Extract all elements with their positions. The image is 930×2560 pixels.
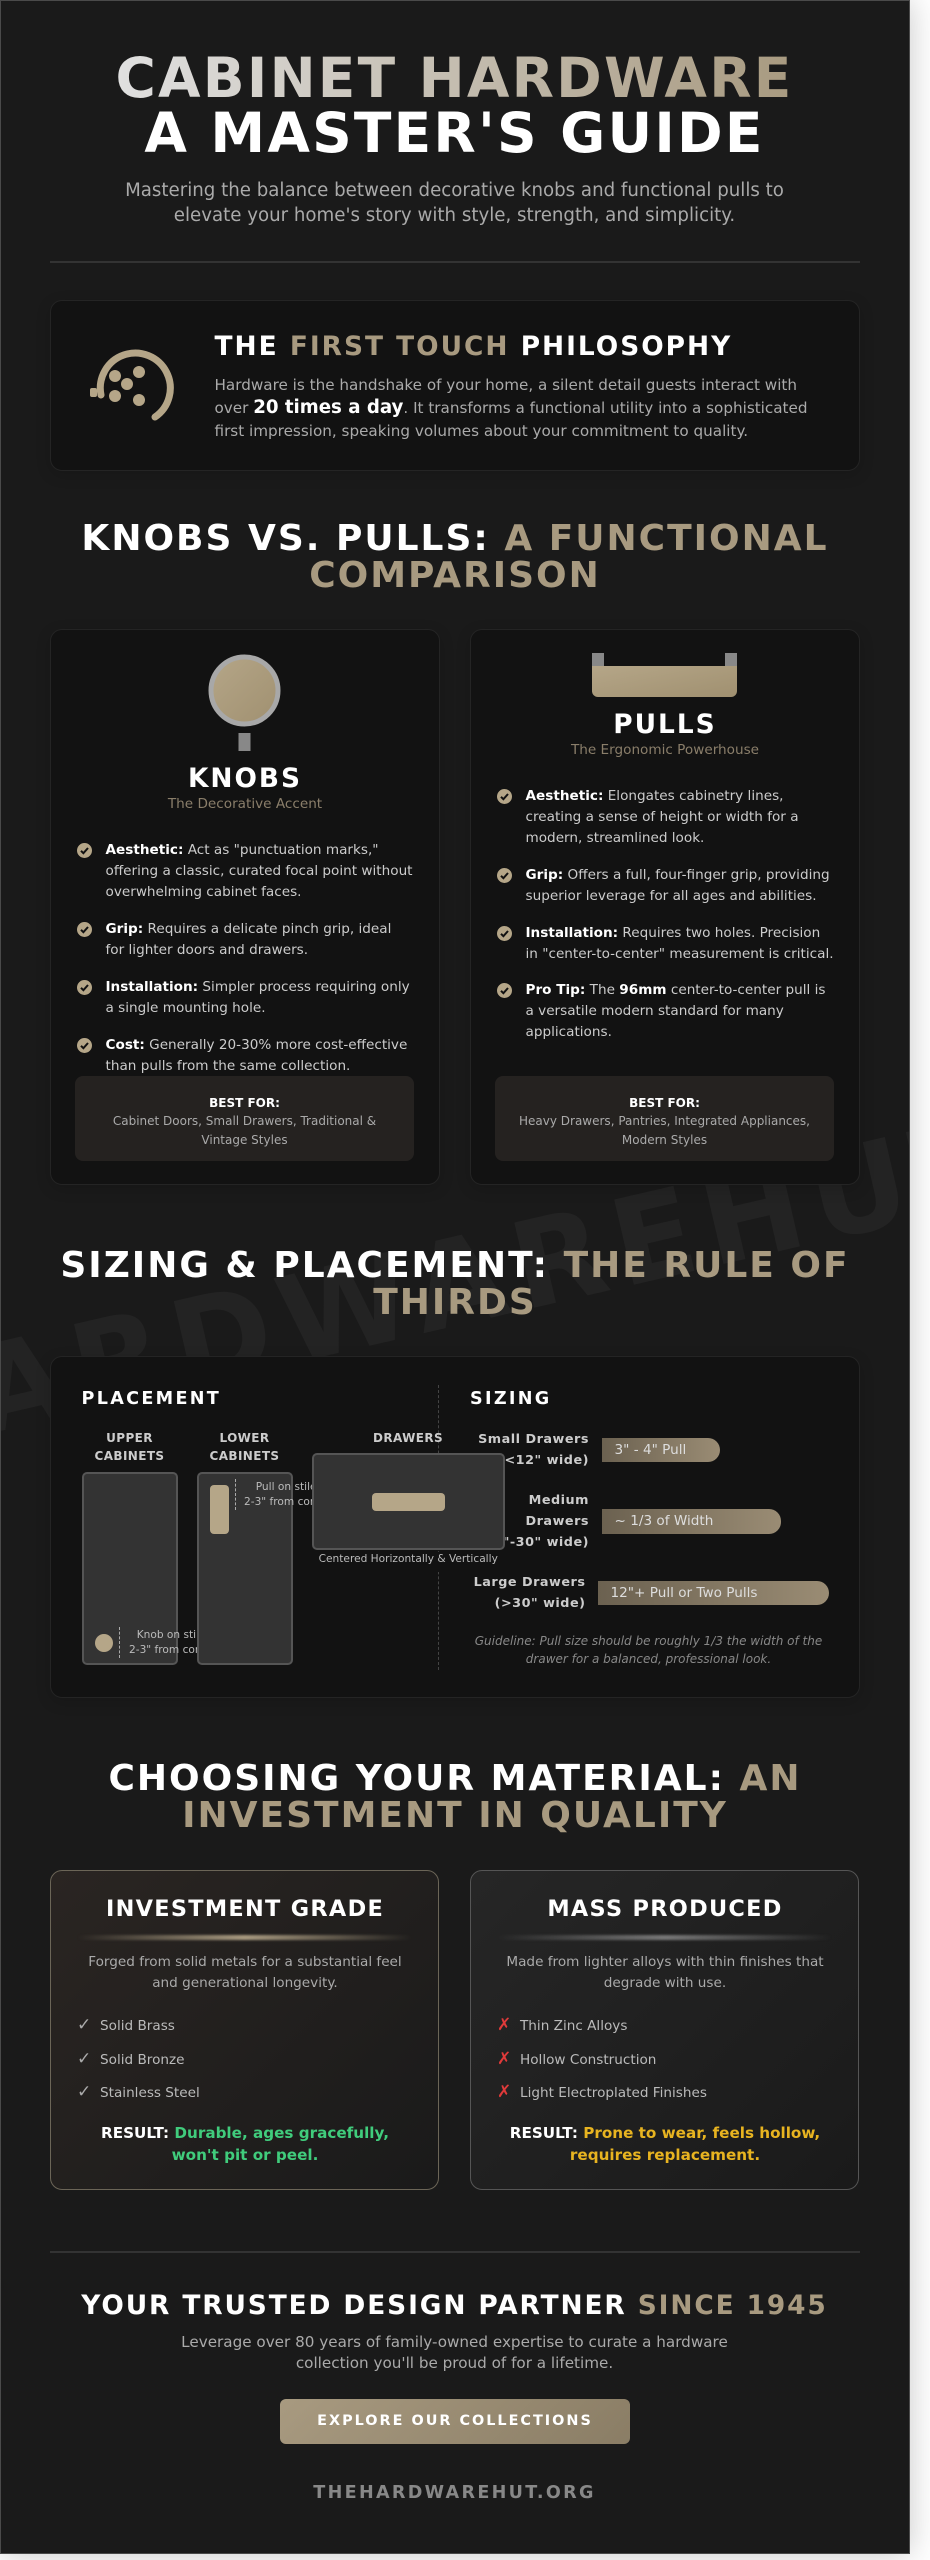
drawer diagram (312, 1453, 505, 1550)
mass produced title: MASS PRODUCED (547, 1896, 783, 1922)
mass result: requires replacement. (570, 2146, 760, 2164)
upper cabinets label: CABINETS (94, 1448, 164, 1462)
mass item: hollow construction: Hollow Construction (520, 2052, 656, 2068)
investment item: stainless steel: Stainless Steel (100, 2085, 200, 2101)
mass item: thin zinc alloys: ✗ (497, 2015, 511, 2035)
website url: THEHARDWAREHUT.ORG (313, 2483, 596, 2503)
knob aesthetic item (77, 842, 413, 900)
knob cost item: Cost: Generally 20-30% more cost-effective (106, 1036, 407, 1052)
pull installation item (497, 924, 834, 962)
sizing: medium drawers bar: ~ 1/3 of Width (614, 1513, 713, 1529)
mass produced description: Made from lighter alloys with thin finishes that (506, 1954, 824, 1970)
knob placement note (129, 1628, 217, 1656)
sizing: medium drawers label (478, 1492, 589, 1550)
pull installation item: Installation: Requires two holes. Precision (526, 924, 820, 940)
knob installation item: Installation: Simpler process requiring only (106, 979, 410, 995)
drawer pull marker (372, 1492, 445, 1511)
investment item: solid brass: Solid Brass (100, 2018, 175, 2034)
knob grip item: Grip: Requires a delicate pinch grip, ideal (106, 921, 391, 937)
pull grip item: superior leverage for all ages and abilities. (526, 888, 817, 904)
knob placement note: 2-3" from corner (129, 1644, 217, 1656)
philosophy heading: THE FIRST TOUCH PHILOSOPHY (214, 330, 732, 362)
drawer placement note: Centered Horizontally & Vertically (319, 1552, 498, 1564)
pull grip item (497, 867, 830, 904)
knob offset dashed guide (119, 1627, 120, 1658)
sizing: large drawers bar (598, 1580, 828, 1605)
pull pro tip item: a versatile modern standard for many (526, 1003, 784, 1019)
pull best for box: BEST FOR: (629, 1096, 700, 1110)
pulls tagline: The Ergonomic Powerhouse (571, 742, 759, 758)
drawers label: DRAWERS (373, 1430, 443, 1444)
footer text (181, 2333, 728, 2372)
upper cabinets label: UPPER (106, 1430, 153, 1444)
mass produced description (506, 1954, 824, 1991)
sizing: small drawers label: Small Drawers (478, 1432, 589, 1446)
section heading: sizing and placement: THIRDS (373, 1282, 537, 1322)
upper cabinets label (94, 1430, 164, 1462)
pull placement note: 2-3" from corner (244, 1496, 332, 1508)
investment grade description: and generational longevity. (152, 1975, 338, 1991)
panel: knobs (50, 629, 440, 1185)
pull offset dashed guide (234, 1479, 236, 1510)
pull aesthetic item: modern, streamlined look. (526, 830, 704, 846)
investment grade title: INVESTMENT GRADE (106, 1896, 384, 1922)
sizing: large drawers label: Large Drawers (474, 1574, 586, 1590)
investment grade description: Forged from solid metals for a substantial feel (88, 1954, 402, 1970)
knob grip item: for lighter doors and drawers. (106, 942, 308, 958)
sizing: small drawers bar: 3" - 4" Pull (614, 1442, 686, 1458)
mass result (510, 2124, 820, 2164)
sizing: small drawers bar (602, 1438, 720, 1462)
footer text: Leverage over 80 years of family-owned expertise to curate a hardware (181, 2333, 728, 2351)
section heading: material (108, 1758, 802, 1836)
header divider (50, 261, 860, 263)
footer divider (50, 2251, 860, 2253)
investment result (101, 2124, 389, 2164)
section heading: material: INVESTMENT IN QUALITY (182, 1794, 728, 1836)
investment grade description (88, 1954, 402, 1991)
knob aesthetic item: offering a classic, curated focal point without (106, 863, 413, 879)
investment result: won't pit or peel. (172, 2146, 318, 2164)
pull aesthetic item (497, 788, 799, 846)
column separator (438, 1385, 439, 1670)
pull placement note (244, 1480, 332, 1508)
knob placement marker (94, 1634, 112, 1652)
philosophy text (214, 376, 808, 440)
section heading: knobs vs pulls: KNOBS VS. PULLS: A FUNCTIONAL (81, 518, 829, 559)
title (115, 46, 794, 164)
mass result: RESULT: Prone to wear, feels hollow, (510, 2124, 820, 2142)
pull installation item: in "center-to-center" measurement is critical. (526, 946, 834, 962)
icon: pull (592, 653, 737, 697)
mass produced gradient rule (497, 1935, 832, 1940)
mass item: light electroplated finishes: ✗ (497, 2082, 511, 2102)
pull pro tip item: applications. (526, 1024, 612, 1040)
sizing heading: SIZING (470, 1389, 552, 1409)
sizing guideline: drawer for a balanced, professional look. (526, 1652, 771, 1666)
knob cost item (77, 1036, 407, 1074)
title: A MASTER'S GUIDE (144, 100, 765, 164)
investment item: stainless steel (77, 2082, 200, 2102)
pull best for box: Heavy Drawers, Pantries, Integrated Appliances, (519, 1114, 810, 1128)
pull grip item: Grip: Offers a full, four-finger grip, providing (526, 867, 830, 883)
panel: mass produced (470, 1870, 859, 2190)
lower cabinets label (210, 1430, 279, 1462)
pull placement note: Pull on stile, (256, 1480, 320, 1492)
knob best for box: Vintage Styles (201, 1133, 288, 1147)
panel: investment grade (50, 1870, 439, 2190)
sizing: medium drawers label: Drawers (526, 1514, 589, 1528)
knob cost item: than pulls from the same collection. (106, 1058, 350, 1074)
knob installation item (77, 979, 410, 1016)
sizing: large drawers bar: 12"+ Pull or Two Pulls (610, 1584, 757, 1600)
pull aesthetic item: creating a sense of height or width for a (526, 809, 799, 825)
knob installation item: a single mounting hole. (106, 1000, 266, 1016)
panel: placement and sizing (50, 1356, 860, 1698)
philosophy text: over 20 times a day. It transforms a functional utility into a sophisticated (214, 397, 808, 418)
investment item: stainless steel: ✓ (77, 2082, 91, 2102)
philosophy text: first impression, speaking volumes about your commitment to quality. (214, 422, 748, 440)
pull pro tip item: Pro Tip: The 96mm center-to-center pull is (526, 982, 825, 998)
sizing: medium drawers label: (12"-30" wide) (478, 1534, 589, 1550)
pull placement marker (210, 1485, 228, 1534)
sizing: large drawers label: (>30" wide) (495, 1596, 586, 1610)
section heading: material: CHOOSING YOUR MATERIAL: AN (108, 1758, 802, 1798)
footer text: collection you'll be proud of for a lifetime. (296, 2354, 613, 2372)
sizing: medium drawers bar (602, 1509, 780, 1534)
sizing: large drawers label (474, 1574, 586, 1610)
knobs name: KNOBS (188, 762, 302, 794)
pull pro tip item (497, 982, 825, 1040)
sizing: medium drawers label: Medium (529, 1492, 589, 1508)
investment result: RESULT: Durable, ages gracefully, (101, 2124, 389, 2142)
investment item: solid brass: ✓ (77, 2015, 91, 2035)
lower cabinets label: CABINETS (210, 1448, 279, 1462)
pull best for box: Modern Styles (622, 1133, 707, 1147)
investment item: solid bronze: ✓ (77, 2048, 91, 2068)
sizing guideline (475, 1634, 822, 1666)
subtitle (125, 180, 784, 226)
pull best for box (495, 1076, 834, 1161)
sizing guideline: Guideline: Pull size should be roughly 1/3 the width of the (475, 1634, 822, 1648)
pulls name: PULLS (613, 708, 717, 740)
button: explore collections (280, 2398, 630, 2444)
investment item: solid bronze: Solid Bronze (100, 2052, 184, 2068)
knobs tagline: The Decorative Accent (168, 796, 322, 812)
pull aesthetic item: Aesthetic: Elongates cabinetry lines, (526, 788, 783, 804)
knob placement note: Knob on stile, (137, 1628, 209, 1640)
panel: pulls (470, 629, 860, 1185)
section heading: knobs vs pulls (81, 518, 829, 596)
investment grade gradient rule (77, 1935, 412, 1940)
sizing: small drawers label (478, 1432, 589, 1468)
footer heading: YOUR TRUSTED DESIGN PARTNER SINCE 1945 (81, 2290, 828, 2320)
icon: knob (208, 654, 280, 751)
sizing: small drawers label: (<12" wide) (498, 1452, 589, 1468)
investment item: solid brass (77, 2015, 175, 2035)
mass item: thin zinc alloys: Thin Zinc Alloys (520, 2018, 627, 2034)
panel: first touch philosophy (50, 300, 860, 471)
subtitle: Mastering the balance between decorative knobs and functional pulls to (125, 180, 784, 201)
button: explore collections: EXPLORE OUR COLLECTIONS (317, 2412, 593, 2428)
philosophy text: Hardware is the handshake of your home, a silent detail guests interact with (214, 376, 797, 394)
knob best for box: BEST FOR: (209, 1096, 280, 1110)
knob aesthetic item: Aesthetic: Act as "punctuation marks," (106, 842, 379, 858)
lower cabinet diagram (196, 1472, 292, 1665)
mass item: hollow construction (497, 2048, 656, 2068)
placement heading: PLACEMENT (82, 1389, 221, 1409)
knob aesthetic item: overwhelming cabinet faces. (106, 884, 301, 900)
section heading: knobs vs pulls: COMPARISON (309, 555, 601, 596)
investment item: solid bronze (77, 2048, 184, 2068)
knob best for box: Cabinet Doors, Small Drawers, Traditional & (113, 1114, 376, 1128)
mass produced description: degrade with use. (604, 1975, 726, 1991)
knob grip item (77, 921, 391, 958)
section heading: sizing and placement: SIZING & PLACEMENT: THE RULE OF (60, 1244, 850, 1286)
icon: cabinet knob with dots (90, 350, 174, 420)
title: CABINET HARDWARE (115, 46, 794, 110)
subtitle: elevate your home's story with style, strength, and simplicity. (174, 204, 735, 226)
mass item: light electroplated finishes: Light Electroplated Finishes (520, 2085, 707, 2101)
lower cabinets label: LOWER (219, 1430, 270, 1444)
knob best for box (75, 1076, 414, 1161)
mass item: thin zinc alloys (497, 2015, 627, 2035)
mass item: hollow construction: ✗ (497, 2048, 511, 2068)
drawer placement note (312, 1552, 505, 1572)
upper cabinet diagram (82, 1472, 178, 1665)
section heading: sizing and placement (60, 1244, 850, 1322)
